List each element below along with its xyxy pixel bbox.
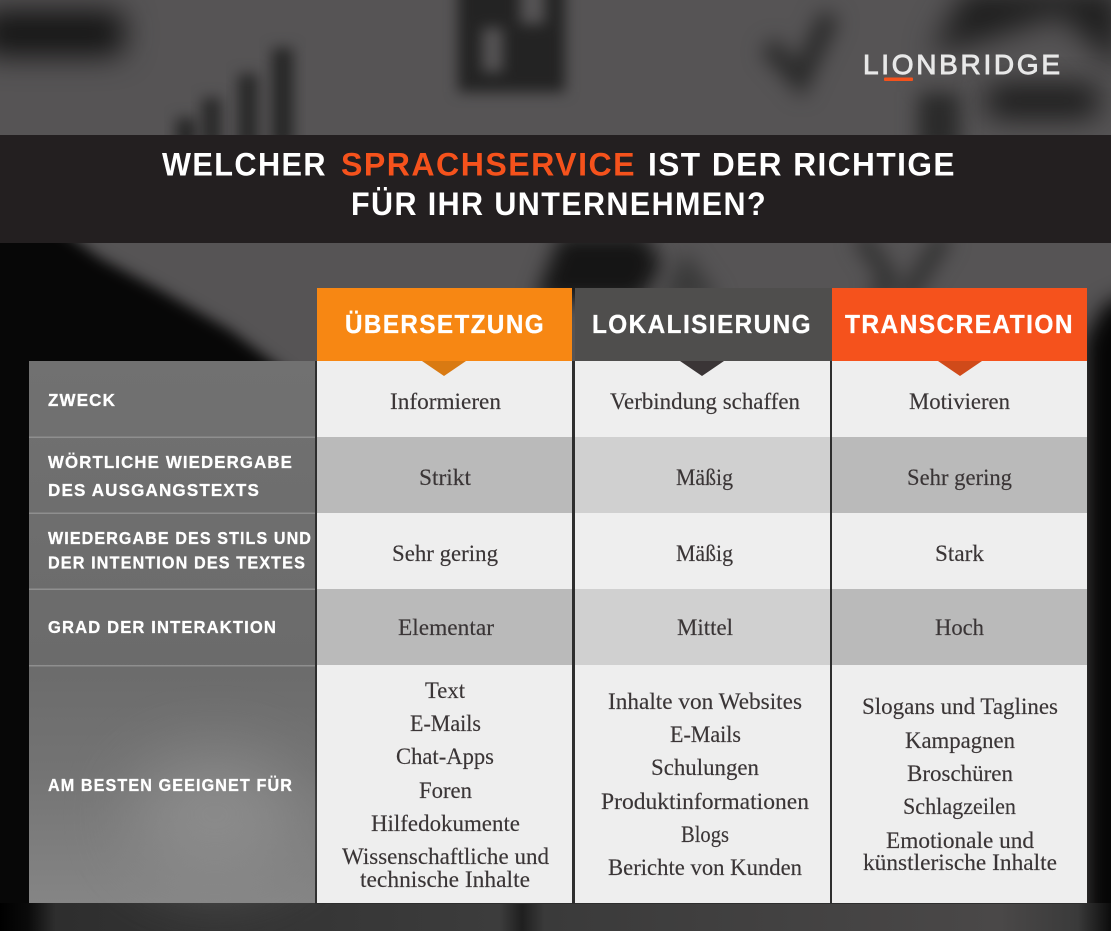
cell values: Übersetzung: Text — [425, 678, 466, 703]
cell values: Lokalisierung: Berichte von Kunden — [608, 855, 802, 880]
title line 1: WELCHER — [162, 146, 327, 182]
title band — [0, 135, 1111, 243]
cell values: Lokalisierung: Blogs — [681, 822, 729, 847]
cell values: Übersetzung: Chat-Apps — [396, 744, 494, 769]
label: Zweck: ZWECK — [48, 390, 116, 410]
title line 1 — [162, 146, 956, 182]
cell values: Lokalisierung: Mäßig — [676, 465, 733, 490]
cell values: Lokalisierung — [601, 389, 810, 880]
cell values: Lokalisierung: Mittel — [677, 615, 733, 640]
label: Grad der Interaktion: GRAD DER INTERAKTION — [48, 617, 277, 637]
title line 1: SPRACHSERVICE — [341, 146, 636, 182]
cell values: Übersetzung: Elementar — [398, 615, 494, 640]
cell values: Übersetzung: Sehr gering — [392, 541, 498, 566]
cell values: Lokalisierung: E-Mails — [670, 722, 741, 747]
row labels column — [29, 361, 315, 903]
cell values: Transcreation: Motivieren — [909, 389, 1010, 414]
label: Stil und Intention: DER INTENTION DES TEXTES — [48, 552, 306, 572]
column: Lokalisierung — [575, 288, 832, 903]
logo: Lionbridge: LIONBRIDGE — [863, 49, 1060, 80]
cell values: Lokalisierung: Verbindung schaffen — [610, 389, 800, 414]
cell values: Lokalisierung: Schulungen — [651, 755, 759, 780]
cell values: Übersetzung — [342, 389, 549, 892]
header: Lokalisierung — [575, 288, 832, 376]
cell values: Transcreation — [862, 389, 1058, 875]
header: Lokalisierung: LOKALISIERUNG — [592, 311, 812, 339]
cell values: Transcreation: Kampagnen — [905, 728, 1015, 753]
cell values: Transcreation: Stark — [935, 541, 984, 566]
cell values: Lokalisierung: Inhalte von Websites — [608, 689, 802, 714]
header: Übersetzung: ÜBERSETZUNG — [345, 310, 545, 339]
cell values: Transcreation: Emotionale und — [886, 828, 1035, 853]
bottom strip — [0, 903, 1111, 931]
cell values: Transcreation: Schlagzeilen — [903, 794, 1016, 819]
cell values: Übersetzung: E-Mails — [410, 711, 481, 736]
label: Stil und Intention: WIEDERGABE DES STILS UND — [48, 528, 312, 548]
cell values: Transcreation: Hoch — [935, 615, 984, 640]
title line 2: FÜR IHR UNTERNEHMEN? — [351, 186, 767, 222]
header: Transcreation: TRANSCREATION — [845, 311, 1074, 339]
header: Übersetzung — [317, 288, 572, 376]
label: wörtliche Wiedergabe: WÖRTLICHE WIEDERGABE — [48, 452, 293, 472]
cell values: Transcreation: künstlerische Inhalte — [863, 850, 1057, 875]
header: Transcreation — [832, 288, 1087, 376]
cell values: Transcreation: Sehr gering — [907, 465, 1012, 490]
cell values: Übersetzung: Wissenschaftliche und — [342, 844, 549, 869]
title line 1: IST DER RICHTIGE — [648, 146, 956, 182]
cell values: Übersetzung: Hilfedokumente — [371, 811, 520, 836]
label: wörtliche Wiedergabe: DES AUSGANGSTEXTS — [48, 480, 260, 500]
cell values: Übersetzung: Strikt — [419, 465, 472, 490]
cell values: Lokalisierung: Produktinformationen — [601, 789, 810, 814]
cell values: Transcreation: Broschüren — [907, 761, 1013, 786]
cell values: Übersetzung: Foren — [419, 778, 472, 803]
column: Übersetzung — [317, 288, 572, 903]
label: am besten geeignet für: AM BESTEN GEEIGNET FÜR — [48, 775, 293, 795]
label: wörtliche Wiedergabe — [48, 452, 293, 500]
cell values: Lokalisierung: Mäßig — [676, 541, 733, 566]
column: Transcreation — [832, 288, 1087, 903]
table backing — [315, 361, 1087, 904]
cell values: Übersetzung: technische Inhalte — [360, 867, 530, 892]
label: Stil und Intention — [48, 528, 312, 572]
cell values: Übersetzung: Informieren — [390, 389, 501, 414]
cell values: Transcreation: Slogans und Taglines — [862, 694, 1058, 719]
